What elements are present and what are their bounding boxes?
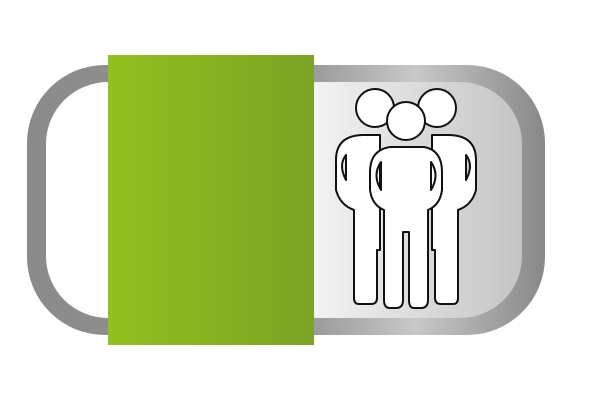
person left (336, 89, 394, 304)
inner pill area (46, 82, 522, 318)
outer gray pill ring (27, 65, 545, 335)
person right (418, 89, 476, 304)
person middle (370, 102, 442, 308)
icon: group of three people (336, 89, 476, 308)
green block (108, 55, 314, 345)
